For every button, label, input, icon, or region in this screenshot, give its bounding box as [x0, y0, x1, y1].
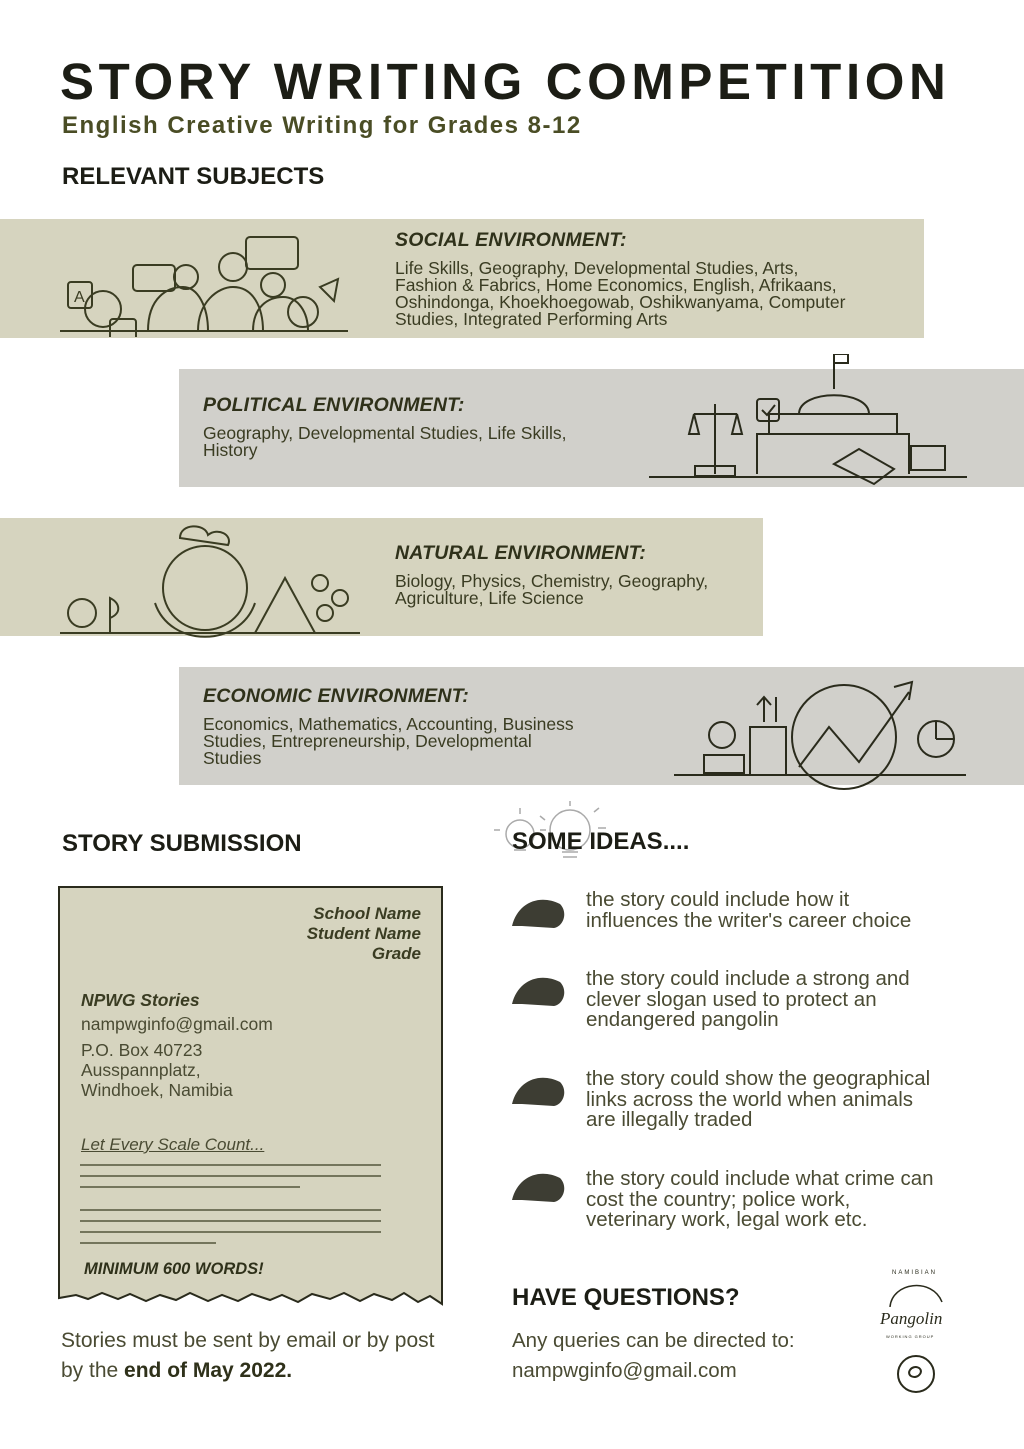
text: address: Windhoek, Namibia [81, 1080, 233, 1100]
logo: namibian pangolin working group: NAMIBIAN [892, 1270, 937, 1276]
panel: economic environment [179, 667, 1024, 785]
icon: social people: A [74, 289, 85, 306]
subtitle: English Creative Writing for Grades 8-12 [62, 112, 582, 139]
logo: namibian pangolin working group [879, 1270, 943, 1393]
idea 4: the story could include what crime can [586, 1167, 934, 1190]
idea 2: the story could include a strong and [586, 967, 910, 990]
text: economic subjects: Studies [203, 748, 261, 768]
text: social subjects: Life Skills, Geography, Developmental Studies, Arts, [395, 258, 798, 278]
text: deadline: by the end of May 2022. [61, 1359, 292, 1382]
text: social subjects: Fashion & Fabrics, Home Economics, English, Afrikaans, [395, 275, 837, 295]
idea 1 [586, 888, 911, 932]
text: natural subjects: Biology, Physics, Chemistry, Geography, [395, 571, 708, 591]
idea 2 [586, 967, 910, 1031]
idea 3 [586, 1067, 930, 1131]
icon: pangolin 4 [512, 1174, 564, 1202]
text: minimum words: MINIMUM 600 WORDS! [84, 1260, 264, 1278]
text: economic subjects [203, 714, 574, 768]
heading: political: POLITICAL ENVIRONMENT: [203, 394, 465, 416]
submission card [58, 886, 443, 1306]
idea 3: links across the world when animals [586, 1088, 913, 1110]
text: contact: nampwginfo@gmail.com [512, 1359, 737, 1382]
idea 4: cost the country; police work, [586, 1188, 850, 1210]
icon: earth in hands [60, 525, 360, 638]
text: address [81, 990, 273, 1100]
text: deadline: Stories must be sent by email or by post [61, 1329, 434, 1352]
icon: pangolin 3 [512, 1078, 564, 1106]
idea 4 [586, 1167, 934, 1231]
text: deadline [61, 1329, 434, 1382]
text: social subjects [395, 258, 846, 329]
idea 3: are illegally traded [586, 1108, 752, 1131]
text: address: nampwginfo@gmail.com [81, 1014, 273, 1034]
panel: political environment [179, 369, 1024, 487]
idea 3: the story could show the geographical [586, 1067, 930, 1090]
idea 1: influences the writer's career choice [586, 908, 911, 932]
text: natural subjects [395, 571, 708, 608]
icon: pangolin 2 [512, 978, 564, 1006]
text: recipient details: Student Name [307, 924, 421, 943]
text: address: Ausspannplatz, [81, 1060, 201, 1080]
panel: natural environment [0, 518, 763, 636]
icon: social people [60, 236, 348, 337]
heading: have questions: HAVE QUESTIONS? [512, 1284, 740, 1311]
text: political subjects [203, 423, 566, 460]
idea 2: clever slogan used to protect an [586, 988, 877, 1010]
idea 2: endangered pangolin [586, 1008, 779, 1031]
logo: namibian pangolin working group: WORKING GROUP [886, 1334, 934, 1339]
text: slogan: Let Every Scale Count... [81, 1135, 264, 1154]
idea 4: veterinary work, legal work etc. [586, 1208, 867, 1231]
heading: story submission: STORY SUBMISSION [62, 830, 302, 857]
panel: social environment [0, 219, 924, 338]
text: social subjects: Oshindonga, Khoekhoegowab, Oshikwanyama, Computer [395, 292, 845, 312]
heading: relevant subjects: RELEVANT SUBJECTS [62, 163, 324, 190]
text: recipient details [307, 904, 421, 963]
icon: light bulbs [494, 801, 606, 858]
heading: some ideas: SOME IDEAS.... [512, 828, 689, 855]
text: political subjects: History [203, 440, 257, 460]
text: economic subjects: Economics, Mathematics, Accounting, Business [203, 714, 574, 734]
text: address: NPWG Stories [81, 990, 200, 1010]
icon: pangolin 1 [512, 900, 564, 928]
text: contact: Any queries can be directed to: [512, 1329, 795, 1352]
title: STORY WRITING COMPETITION [60, 53, 950, 110]
heading: social: SOCIAL ENVIRONMENT: [395, 229, 627, 251]
text: recipient details: Grade [372, 944, 421, 963]
icon: government building [649, 354, 967, 486]
text: social subjects: Studies, Integrated Performing Arts [395, 309, 667, 329]
heading: economic: ECONOMIC ENVIRONMENT: [203, 685, 469, 707]
text: natural subjects: Agriculture, Life Science [395, 588, 584, 608]
text: contact [512, 1329, 795, 1382]
text: recipient details: School Name [313, 904, 421, 923]
icon: economy chart [674, 680, 966, 790]
text: address: P.O. Box 40723 [81, 1040, 202, 1060]
heading: natural: NATURAL ENVIRONMENT: [395, 542, 646, 564]
heading: some ideas [494, 801, 689, 858]
text: economic subjects: Studies, Entrepreneurship, Developmental [203, 731, 532, 751]
logo: namibian pangolin working group: Pangolin [879, 1309, 942, 1328]
text: political subjects: Geography, Developmental Studies, Life Skills, [203, 423, 566, 443]
idea 1: the story could include how it [586, 888, 849, 911]
